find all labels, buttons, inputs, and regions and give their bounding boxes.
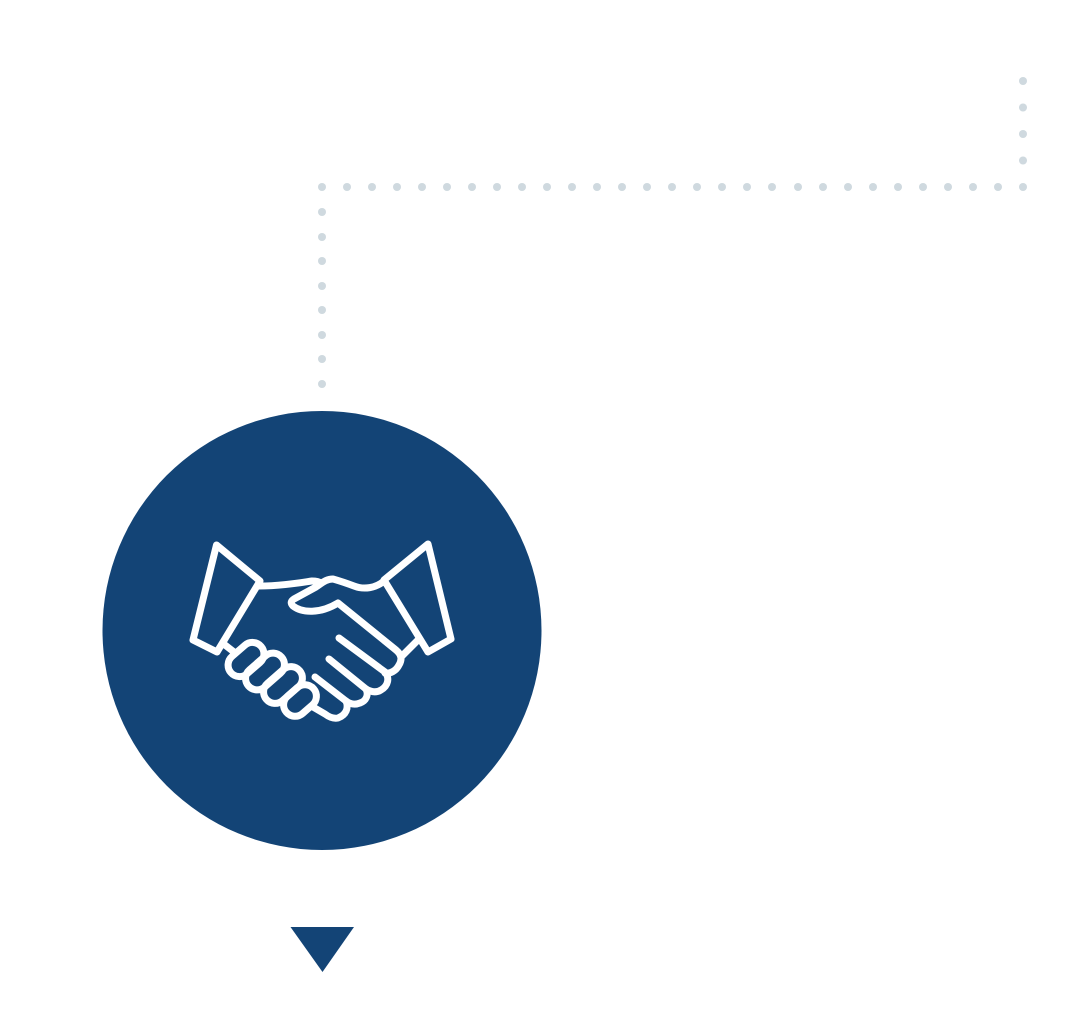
- icon: right hand fingers: [329, 638, 388, 692]
- icon: wrist connectors: [225, 645, 234, 652]
- icon: left hand fingers: [223, 638, 269, 681]
- icon: left cuff: [193, 545, 260, 652]
- icon: right hand and thumb: [291, 579, 401, 673]
- icon: handshake: [193, 544, 451, 721]
- blue circle: [102, 411, 542, 850]
- dotted connector line: [318, 77, 1027, 388]
- arrow: down triangle: [290, 927, 354, 972]
- icon: left hand top edge: [259, 581, 321, 586]
- icon: right cuff: [384, 544, 451, 652]
